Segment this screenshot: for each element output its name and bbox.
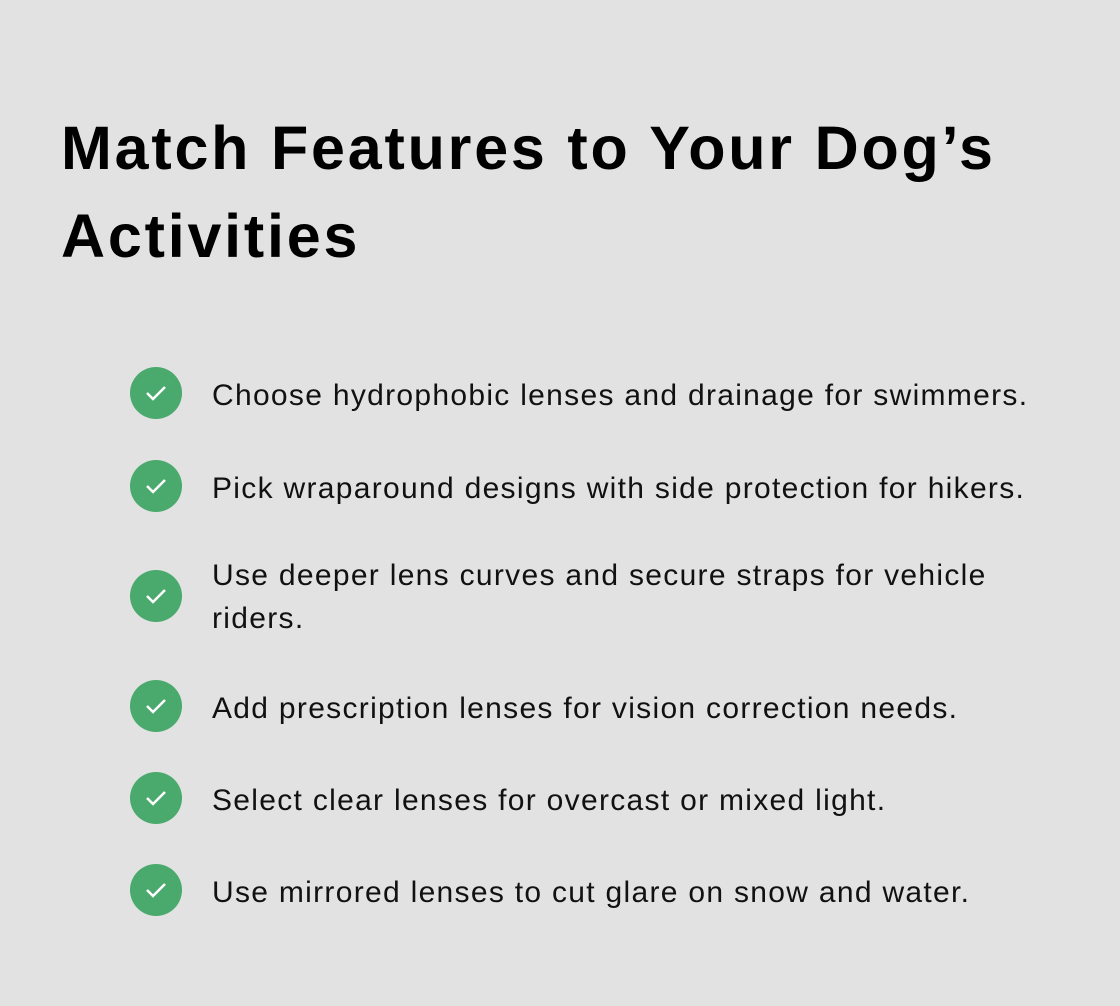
text: Pick wraparound designs with side protection for hikers. <box>212 472 1025 505</box>
icon: check <box>130 680 182 732</box>
icon: check <box>130 864 182 916</box>
title: Activities <box>61 202 360 270</box>
item 5 <box>130 772 886 824</box>
title <box>61 114 996 270</box>
icon: check <box>130 570 182 622</box>
icon: check <box>130 367 182 419</box>
icon: check <box>130 460 182 512</box>
text: Select clear lenses for overcast or mixed light. <box>212 784 886 817</box>
text: Use deeper lens curves and secure straps for vehicle riders. <box>212 559 987 635</box>
item 4 <box>130 680 958 732</box>
text: Use mirrored lenses to cut glare on snow and water. <box>212 876 970 909</box>
text: Choose hydrophobic lenses and drainage for swimmers. <box>212 379 1028 412</box>
item 1 <box>130 367 1028 419</box>
icon: check <box>130 772 182 824</box>
item 6 <box>130 864 970 916</box>
text: Add prescription lenses for vision correction needs. <box>212 692 958 725</box>
item 2 <box>130 460 1025 512</box>
title: Match Features to Your Dog’s <box>61 114 996 182</box>
item 3 <box>130 559 987 635</box>
